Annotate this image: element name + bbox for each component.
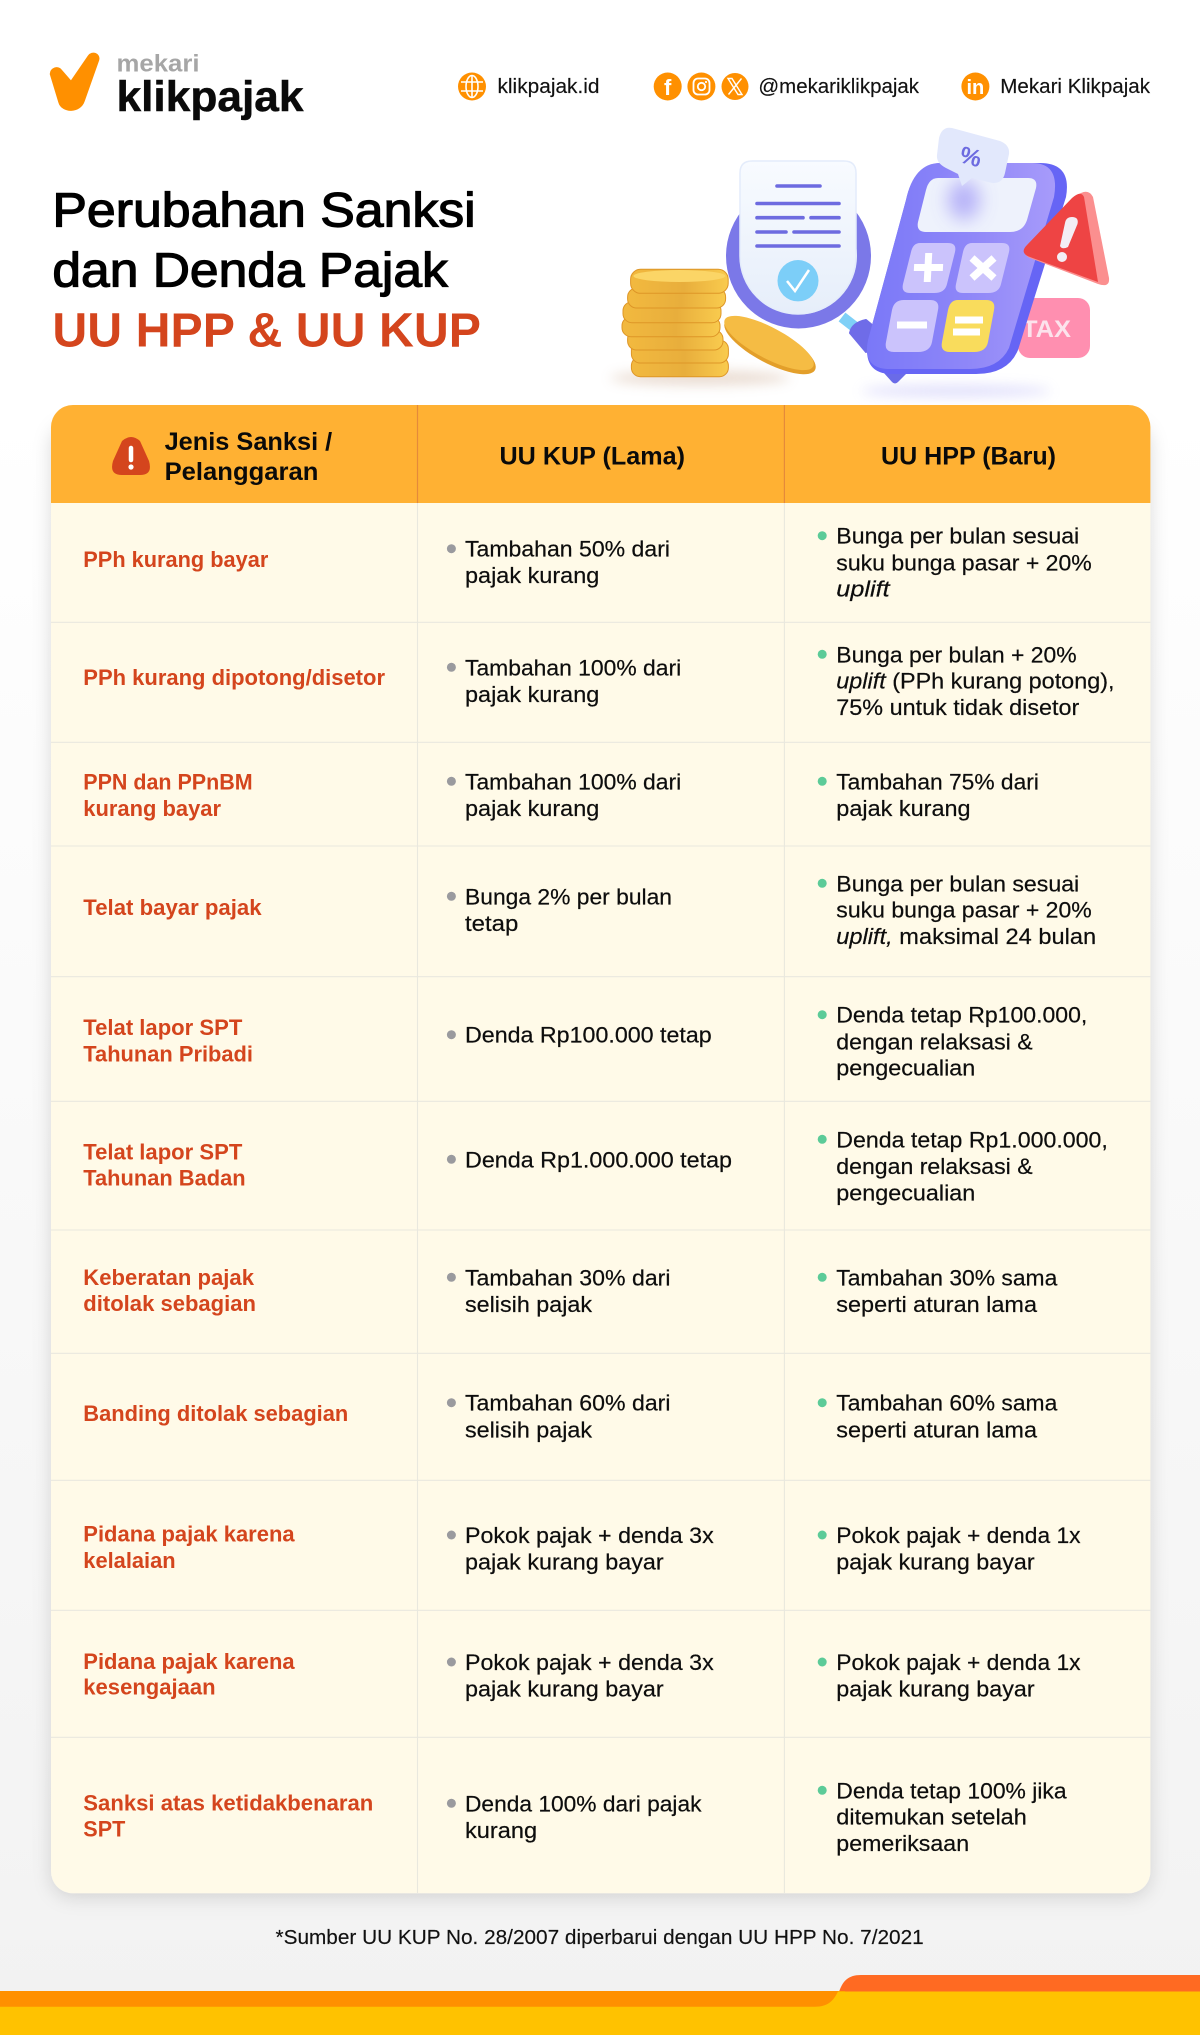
row: Sanksi atas ketidakbenaran SPT: Denda tetap 100% jika <box>836 1778 1067 1803</box>
row: Telat lapor SPT Tahunan Pribadi: Denda tetap Rp100.000, <box>836 1003 1087 1028</box>
row: Keberatan pajak ditolak sebagian: seperti aturan lama <box>836 1292 1038 1317</box>
row: PPN dan PPnBM kurang bayar: Tambahan 100% dari <box>465 769 681 794</box>
icon: linkedin <box>961 72 989 100</box>
row: Pidana pajak karena kesengajaan: Pokok pajak + denda 3x <box>465 1650 714 1675</box>
row: Pidana pajak karena kesengajaan: pajak kurang bayar <box>465 1677 664 1702</box>
row: Keberatan pajak ditolak sebagian: selisih pajak <box>465 1292 593 1317</box>
row: Banding ditolak sebagian: Tambahan 60% sama <box>836 1391 1058 1416</box>
row: Telat bayar pajak <box>83 871 1096 949</box>
row: PPh kurang bayar: uplift <box>836 576 891 601</box>
row: Sanksi atas ketidakbenaran SPT: kurang <box>465 1818 537 1843</box>
row: Banding ditolak sebagian <box>83 1391 1058 1442</box>
heading: jenis sanksi <box>165 428 332 486</box>
footer color bands <box>0 1975 1200 2035</box>
row: PPN dan PPnBM kurang bayar: kurang bayar <box>83 796 221 821</box>
icon: warning <box>112 437 150 475</box>
icon: percent speech bubble: % <box>957 142 984 173</box>
row: Pidana pajak karena kelalaian: Pokok pajak + denda 3x <box>465 1523 714 1548</box>
heading: jenis sanksi: Jenis Sanksi / <box>165 428 332 456</box>
table body background <box>51 420 1150 1893</box>
icon: globe <box>458 72 486 100</box>
row: Telat lapor SPT Tahunan Pribadi <box>83 1003 1087 1081</box>
row: Banding ditolak sebagian: Banding ditolak sebagian <box>83 1401 348 1426</box>
row: Banding ditolak sebagian: Tambahan 60% dari <box>465 1391 670 1416</box>
button: equals <box>942 300 994 352</box>
row: Telat bayar pajak: suku bunga pasar + 20% <box>836 898 1092 923</box>
row: Telat lapor SPT Tahunan Pribadi: Denda Rp100.000 tetap <box>465 1023 712 1048</box>
row: PPN dan PPnBM kurang bayar: PPN dan PPnBM <box>83 769 253 794</box>
icon: warning triangle <box>1024 192 1109 285</box>
row: Telat lapor SPT Tahunan Badan: Denda tetap Rp1.000.000, <box>836 1127 1108 1152</box>
row: Sanksi atas ketidakbenaran SPT: Sanksi atas ketidakbenaran <box>83 1790 373 1815</box>
row: PPN dan PPnBM kurang bayar: Tambahan 75% dari <box>836 769 1039 794</box>
row: Pidana pajak karena kelalaian: pajak kurang bayar <box>836 1550 1035 1575</box>
heading: UU KUP lama: UU KUP (Lama) <box>500 442 685 470</box>
row: PPh kurang dipotong/disetor: Bunga per bulan + 20% <box>836 642 1077 667</box>
row: PPh kurang dipotong/disetor: pajak kurang <box>465 682 599 707</box>
row: Sanksi atas ketidakbenaran SPT: ditemukan setelah <box>836 1805 1027 1830</box>
row: Sanksi atas ketidakbenaran SPT: Denda 100% dari pajak <box>465 1791 703 1816</box>
button: minus <box>886 300 938 352</box>
icon: document with check <box>740 161 856 314</box>
button: multiply <box>956 243 1009 293</box>
icon: coin stack <box>622 269 728 377</box>
row: Pidana pajak karena kesengajaan <box>83 1649 1081 1702</box>
row: Telat bayar pajak: Telat bayar pajak <box>83 895 262 920</box>
logo word: klikpajak: klikpajak <box>116 73 304 121</box>
row: Banding ditolak sebagian: selisih pajak <box>465 1417 593 1442</box>
footnote: *Sumber UU KUP No. 28/2007 diperbarui dengan UU HPP No. 7/2021 <box>276 1927 924 1949</box>
row: PPN dan PPnBM kurang bayar: pajak kurang <box>465 796 599 821</box>
icon: tax card <box>1018 298 1090 358</box>
header contact links <box>458 72 1151 100</box>
icon: magnifier ring <box>733 190 864 322</box>
row: Telat bayar pajak: Bunga per bulan sesuai <box>836 871 1079 896</box>
row: PPh kurang bayar: pajak kurang <box>465 563 599 588</box>
row: Telat lapor SPT Tahunan Badan: Denda Rp1.000.000 tetap <box>465 1147 732 1172</box>
icon: calculator <box>867 163 1067 384</box>
row: Telat lapor SPT Tahunan Pribadi: Telat lapor SPT <box>83 1015 243 1040</box>
row: Sanksi atas ketidakbenaran SPT: SPT <box>83 1817 126 1842</box>
ground shadows <box>610 371 1051 397</box>
row: Keberatan pajak ditolak sebagian: Tambahan 30% sama <box>836 1265 1058 1290</box>
title: Perubahan Sanksi <box>52 185 476 238</box>
illustration: coins, magnifier, calculator <box>610 128 1109 397</box>
row: Telat lapor SPT Tahunan Pribadi: pengecualian <box>836 1056 975 1081</box>
row: Telat bayar pajak: uplift, maksimal 24 bulan <box>836 924 1096 949</box>
social handle text: @mekariklikpajak <box>758 76 920 98</box>
icon: percent speech bubble <box>937 128 1009 186</box>
icon: x <box>722 73 748 100</box>
icon: tax card: TAX <box>1022 316 1071 343</box>
title: UU HPP & UU KUP <box>52 305 481 358</box>
table header bar <box>51 405 1150 503</box>
table panel <box>51 405 1150 1893</box>
heading: jenis sanksi: Pelanggaran <box>165 458 318 486</box>
row: Telat bayar pajak: tetap <box>465 911 518 936</box>
row: PPN dan PPnBM kurang bayar <box>83 769 1039 821</box>
row: Keberatan pajak ditolak sebagian <box>83 1265 1058 1317</box>
row: Pidana pajak karena kelalaian: pajak kurang bayar <box>465 1550 664 1575</box>
row: PPh kurang bayar: suku bunga pasar + 20% <box>836 550 1092 575</box>
icon: magnifier handle <box>842 317 872 352</box>
button: plus <box>903 243 955 293</box>
row: Pidana pajak karena kesengajaan: pajak kurang bayar <box>836 1677 1035 1702</box>
row: Pidana pajak karena kelalaian: kelalaian <box>83 1548 176 1573</box>
row: Keberatan pajak ditolak sebagian: ditolak sebagian <box>83 1291 256 1316</box>
row: PPh kurang dipotong/disetor: Tambahan 100% dari <box>465 655 681 680</box>
row: PPh kurang dipotong/disetor: 75% untuk tidak disetor <box>836 695 1079 720</box>
icon: facebook: f <box>664 75 672 100</box>
row: PPh kurang dipotong/disetor: uplift (PPh kurang potong), <box>836 669 1114 694</box>
row: Keberatan pajak ditolak sebagian: Keberatan pajak <box>83 1265 255 1290</box>
logo word: mekari: mekari <box>116 50 200 78</box>
row: PPh kurang bayar: Bunga per bulan sesuai <box>836 524 1079 549</box>
title <box>52 185 481 358</box>
row: Pidana pajak karena kelalaian: Pidana pajak karena <box>83 1522 295 1546</box>
row: PPh kurang dipotong/disetor: PPh kurang dipotong/disetor <box>83 665 385 690</box>
row: PPh kurang dipotong/disetor <box>83 642 1114 720</box>
row: Banding ditolak sebagian: seperti aturan lama <box>836 1417 1038 1442</box>
row: Sanksi atas ketidakbenaran SPT: pemeriksaan <box>836 1831 969 1856</box>
row: Telat bayar pajak: Bunga 2% per bulan <box>465 884 672 909</box>
logo: mekari klikpajak <box>50 50 304 121</box>
title: dan Denda Pajak <box>52 245 449 298</box>
table grid lines <box>51 503 1150 1893</box>
row: Pidana pajak karena kesengajaan: kesengajaan <box>83 1675 216 1700</box>
website text: klikpajak.id <box>498 76 600 98</box>
row: Telat lapor SPT Tahunan Pribadi: Tahunan Pribadi <box>83 1042 253 1067</box>
row: Telat lapor SPT Tahunan Badan <box>83 1127 1108 1205</box>
icon: linkedin: in <box>967 77 984 99</box>
row: Telat lapor SPT Tahunan Badan: Tahunan Badan <box>83 1166 246 1191</box>
linkedin text: Mekari Klikpajak <box>1000 76 1151 98</box>
logo check shape <box>50 53 99 110</box>
row: Pidana pajak karena kesengajaan: Pokok pajak + denda 1x <box>836 1650 1081 1675</box>
row: Telat lapor SPT Tahunan Badan: pengecualian <box>836 1180 975 1205</box>
row: PPh kurang bayar: Tambahan 50% dari <box>465 537 670 562</box>
row: Telat lapor SPT Tahunan Pribadi: dengan relaksasi & <box>836 1029 1033 1054</box>
row: Telat lapor SPT Tahunan Badan: dengan relaksasi & <box>836 1154 1033 1179</box>
row: Pidana pajak karena kelalaian <box>83 1522 1081 1575</box>
row: Pidana pajak karena kelalaian: Pokok pajak + denda 1x <box>836 1523 1081 1548</box>
row: Pidana pajak karena kesengajaan: Pidana pajak karena <box>83 1649 295 1674</box>
row: Sanksi atas ketidakbenaran SPT <box>83 1778 1067 1856</box>
row: Telat lapor SPT Tahunan Badan: Telat lapor SPT <box>83 1139 243 1164</box>
row: PPh kurang bayar: PPh kurang bayar <box>83 547 269 572</box>
icon: leaning coin <box>717 306 823 385</box>
icon: facebook <box>654 72 682 100</box>
row: Keberatan pajak ditolak sebagian: Tambahan 30% dari <box>465 1265 670 1290</box>
heading: UU HPP baru: UU HPP (Baru) <box>881 442 1056 470</box>
icon: instagram <box>687 72 715 100</box>
row: PPN dan PPnBM kurang bayar: pajak kurang <box>836 796 971 821</box>
row: PPh kurang bayar <box>83 524 1092 601</box>
